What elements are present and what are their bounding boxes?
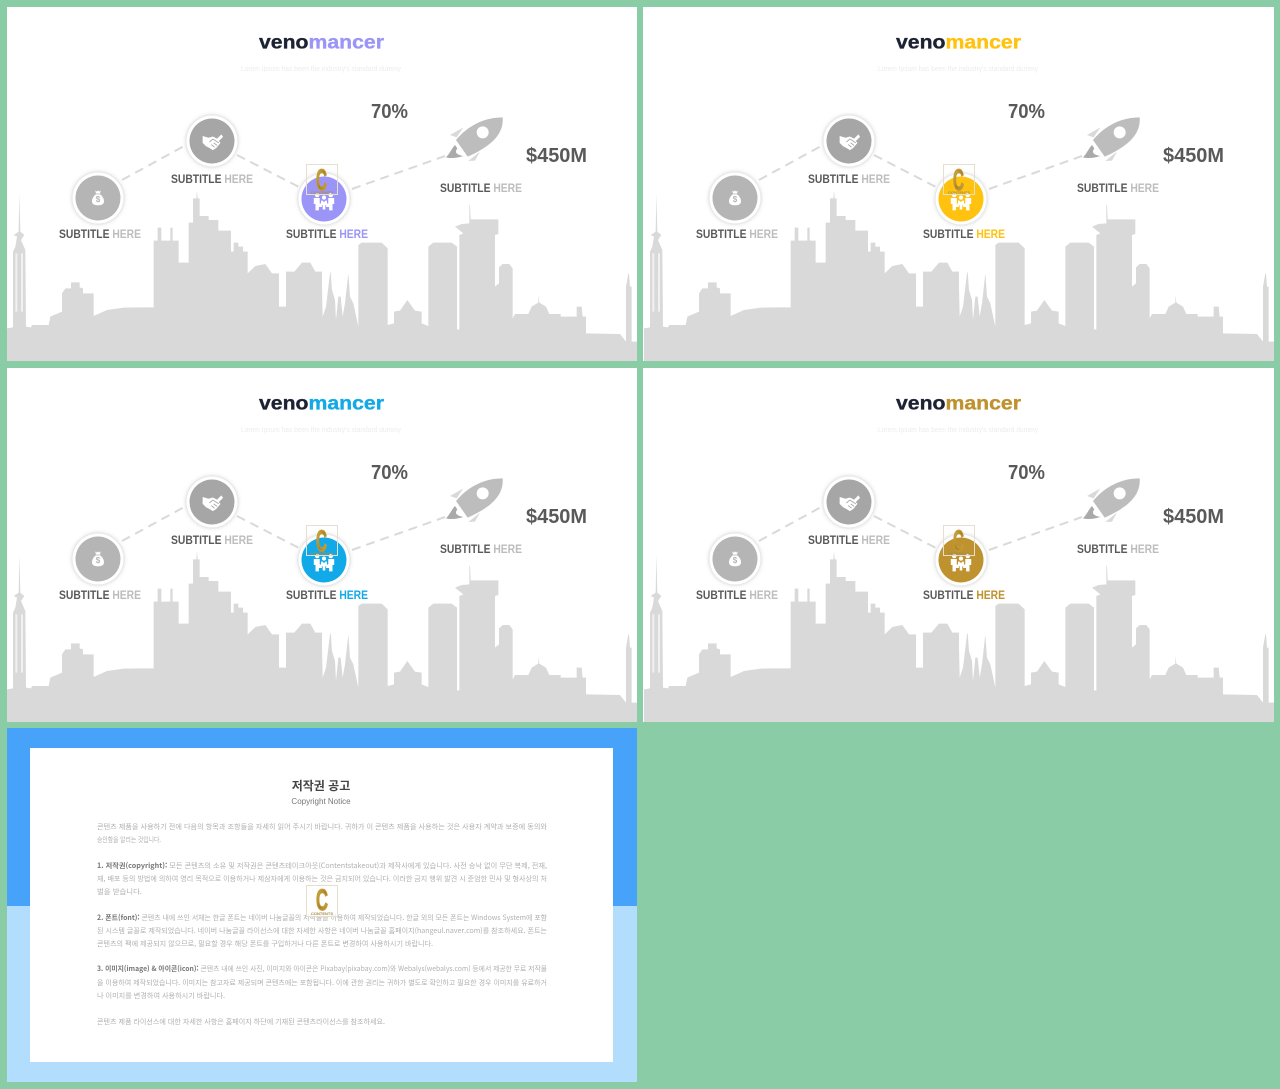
watermark: CONTENTS [948, 190, 970, 195]
panel: purple slide [7, 7, 637, 361]
dashed connector lines [122, 145, 445, 189]
stat: $450M: $450M [1163, 506, 1224, 528]
stat: 70%: 70% [1008, 462, 1045, 484]
skyline silhouette [644, 551, 1274, 722]
icon: rocket [446, 117, 503, 161]
icon: money bag node [72, 172, 124, 224]
icon: rocket [446, 478, 503, 522]
section 2: font: 콘텐츠의 팩에 제공되지 않으므로, 필요할 경우 해당 폰트를 구입하거나 다른 폰트로 변경하여 사용하시기 바랍니다. [97, 939, 433, 949]
icon: handshake node [186, 116, 238, 166]
tagline: Lorem Ipsum has been the industry's standard dummy [878, 427, 1038, 434]
watermark: CONTENTS [948, 551, 970, 556]
panel: blue slide [7, 368, 637, 722]
panel: gold slide [643, 368, 1274, 722]
title: logo: veno mancer [896, 32, 1022, 54]
skyline silhouette [7, 551, 637, 722]
stat: 70%: 70% [1008, 101, 1045, 123]
icon: handshake node [824, 116, 874, 166]
subtitle 1: SUBTITLE HERE [696, 588, 778, 602]
icon: people node [298, 534, 350, 586]
intro paragraph [97, 822, 548, 845]
watermark: C [316, 884, 328, 917]
icon: people node [936, 534, 986, 586]
subtitle 2: SUBTITLE HERE [171, 533, 253, 547]
watermark [306, 164, 338, 197]
icon: money bag node: $ [96, 556, 101, 565]
tagline: Lorem Ipsum has been the industry's standard dummy [241, 427, 401, 434]
icon: handshake node [824, 476, 874, 528]
intro paragraph: 승인함을 알리는 것입니다. [97, 835, 161, 845]
watermark: C [953, 525, 964, 558]
panel: yellow slide [643, 7, 1274, 361]
watermark: CONTENTS [311, 190, 333, 195]
section 3: image and icon: 3. 이미지(image) & 아이콘(icon): 콘텐츠 내에 쓰인 사진, 이미지와 아이콘은 Pixabay(pixabay.com)와 Webalys(webalys.com) 등에서 제공한 무료 저작물 [97, 964, 548, 974]
section 2: font [97, 913, 548, 949]
icon: rocket [1083, 478, 1140, 522]
stat: $450M: $450M [526, 506, 587, 528]
closing line: 콘텐츠 제품 라이선스에 대한 자세한 사항은 홈페이지 하단에 기재된 콘텐츠라이선스를 참조하세요. [97, 1017, 385, 1027]
watermark [306, 884, 338, 917]
title: logo: veno mancer [896, 394, 1022, 414]
section 1: copyright: 벌을 받습니다. [97, 887, 142, 897]
icon: money bag node [710, 172, 760, 224]
tagline: Lorem Ipsum has been the industry's standard dummy [241, 66, 401, 73]
subtitle 3: SUBTITLE HERE [923, 227, 1005, 241]
subtitle 2: SUBTITLE HERE [808, 533, 890, 547]
section 2: font: 된 시스템 글꼴로 제작되었습니다. 네이버 나눔글꼴 라이선스에 대한 자세한 사항은 네이버 나눔글꼴 홈페이지(hangeul.naver.com)를 참조하세요. 폰트는 [97, 926, 548, 936]
icon: rocket [1083, 117, 1140, 161]
section 3: image and icon: 을 이용하여 제작되었습니다. 이미지는 참고자료 제공되며 콘텐츠에는 포함됩니다. 이에 관한 권리는 귀하가 별도로 확인하고 필요한 경우 이미지를 유료하거 [97, 978, 547, 988]
dashed connector lines [122, 506, 445, 550]
section 1: copyright: 재, 배포 등의 방법에 의하여 영리 목적으로 이용하거나 제삼자에게 이용하는 것은 금지되어 있습니다. 이러한 금지 행위 발견 시 준엄한 민사 및 형사상의 처 [97, 874, 547, 884]
watermark [944, 164, 974, 197]
stat: $450M: $450M [526, 145, 587, 167]
subtitle 1: SUBTITLE HERE [59, 227, 141, 241]
title: logo: veno mancer [259, 32, 385, 54]
watermark: C [316, 164, 327, 197]
subtitle 4: SUBTITLE HERE [440, 181, 522, 195]
subtitle 3: SUBTITLE HERE [286, 588, 368, 602]
subtitle 3: SUBTITLE HERE [286, 227, 368, 241]
subtitle 2: SUBTITLE HERE [808, 172, 890, 186]
dashed connector lines [759, 506, 1082, 550]
watermark [944, 525, 974, 558]
tagline: Lorem Ipsum has been the industry's standard dummy [878, 66, 1038, 73]
watermark: C [953, 164, 964, 197]
section 1: copyright: 1. 저작권(copyright): 모든 콘텐츠의 소유 및 저작권은 콘텐츠테이크아웃(Contentstakeout)과 제작사에게 있습니다. 사전 승낙 없이 무단 복제, 전재, [97, 861, 547, 871]
section 1: copyright [97, 861, 547, 897]
section 2: font: 2. 폰트(font): 콘텐츠 내에 쓰인 서체는 한글 폰트는 네이버 나눔글꼴의 저작물을 이용하여 제작되었습니다. 한글 외의 모든 폰트는 Windows System에 포함 [97, 913, 548, 923]
panel: copyright notice [7, 728, 637, 1082]
section 3: image and icon [97, 964, 548, 1001]
icon: money bag node [72, 534, 124, 584]
skyline silhouette [7, 190, 637, 361]
subtitle 4: SUBTITLE HERE [1077, 181, 1159, 195]
subtitle 4: SUBTITLE HERE [440, 542, 522, 556]
icon: people node [298, 174, 350, 224]
icon: money bag node: $ [733, 195, 738, 204]
icon: money bag node: $ [96, 195, 101, 204]
stat: 70%: 70% [371, 462, 408, 484]
title: logo: veno mancer [259, 394, 385, 414]
stat: 70%: 70% [371, 101, 408, 123]
subtitle 4: SUBTITLE HERE [1077, 542, 1159, 556]
section 3: image and icon: 나 이미지를 변경하여 사용하시기 바랍니다. [97, 991, 225, 1001]
intro paragraph: 콘텐츠 제품을 사용하기 전에 다음의 항목과 조항들을 자세히 읽어 주시기 바랍니다. 귀하가 이 콘텐츠 제품을 사용하는 것은 사용자 계약과 보증에 동의와 [97, 822, 548, 832]
subtitle 3: SUBTITLE HERE [923, 588, 1005, 602]
icon: money bag node [710, 534, 760, 584]
watermark: CONTENTS [311, 911, 333, 916]
icon: people node [936, 174, 986, 224]
subtitle 1: SUBTITLE HERE [59, 588, 141, 602]
icon: handshake node [186, 476, 238, 528]
dashed connector lines [759, 145, 1082, 189]
notice subheading: Copyright Notice [291, 797, 351, 806]
subtitle 1: SUBTITLE HERE [696, 227, 778, 241]
stat: $450M: $450M [1163, 145, 1224, 167]
watermark: CONTENTS [311, 551, 333, 556]
icon: money bag node: $ [733, 556, 738, 565]
notice heading: 저작권 공고 [292, 778, 350, 793]
watermark: C [316, 525, 327, 558]
subtitle 2: SUBTITLE HERE [171, 172, 253, 186]
skyline silhouette [644, 190, 1274, 361]
watermark [306, 525, 338, 558]
